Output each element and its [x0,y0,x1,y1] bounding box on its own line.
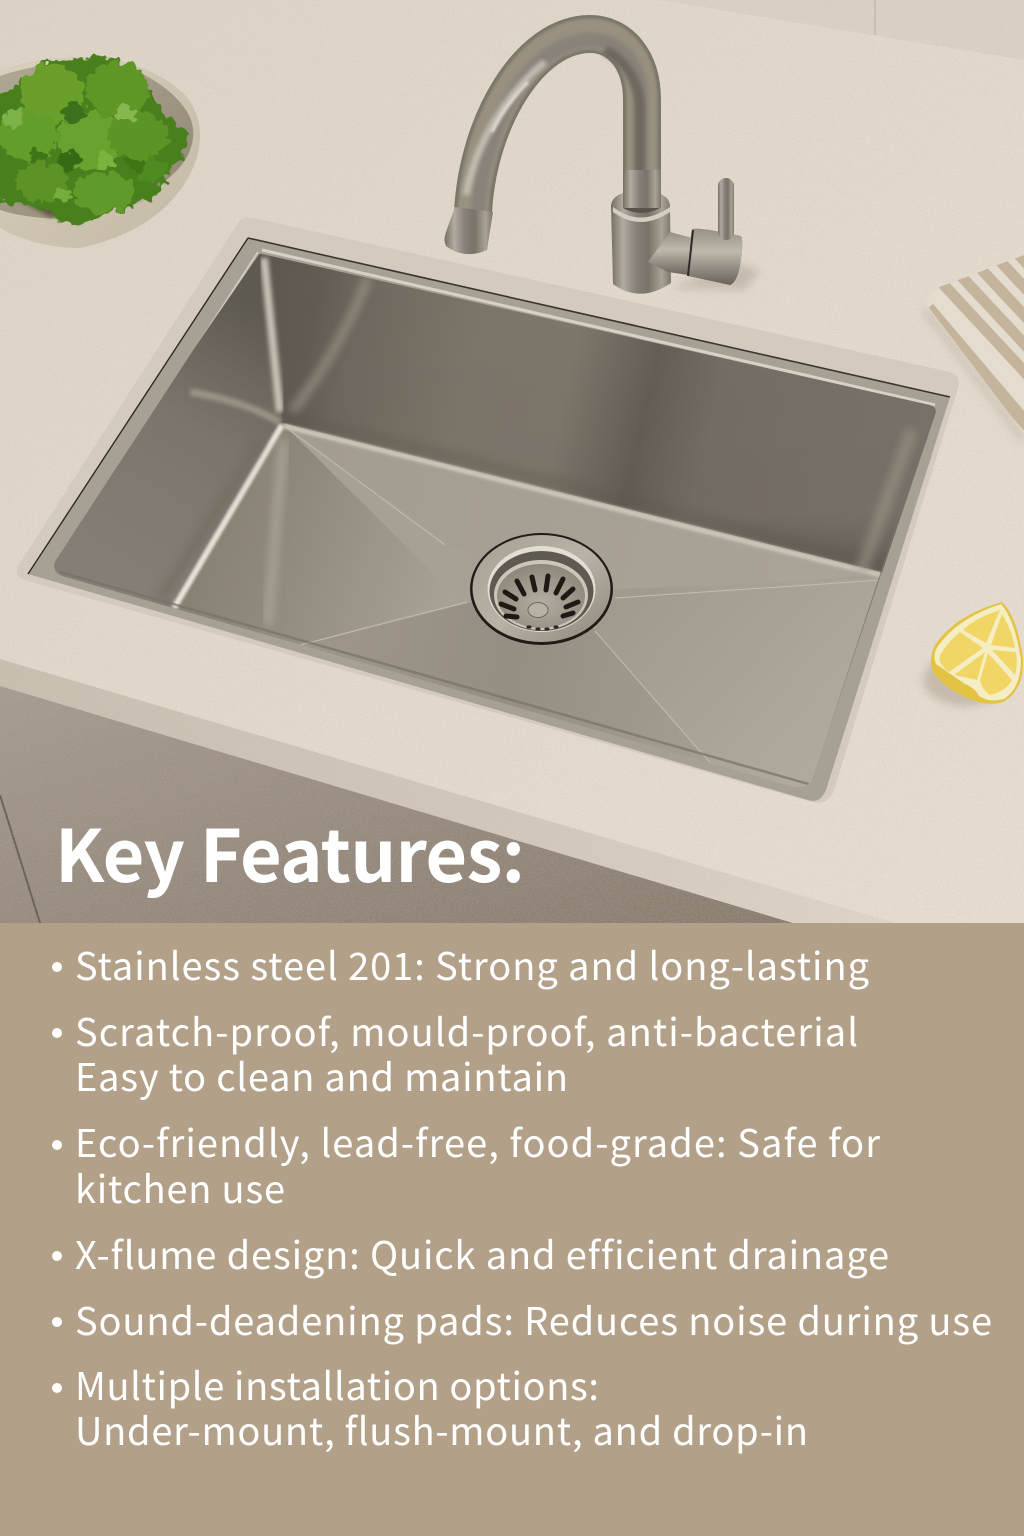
bullet 2 [52,1002,858,1102]
shaded basin edge [60,410,935,785]
bullet 2: Easy to clean and maintain [75,1047,568,1102]
feature list [52,936,992,1456]
creases and reflections [160,258,912,625]
cabinet front [0,684,793,923]
towel shadow [925,310,1024,440]
basin [40,250,940,795]
bullet 3 [52,1113,880,1214]
cabinet door seam [0,795,40,923]
nozzle [444,207,493,254]
counter front edge [0,659,895,923]
lemon pith [934,604,1021,700]
base collar ring [613,207,670,222]
fold lines [284,426,882,765]
kitchen photo illustration [0,0,1024,923]
base body [611,191,671,294]
drain cap [528,602,548,618]
counter speckle [0,0,1024,923]
faucet [444,34,760,294]
faucet shadow [670,262,760,290]
bullet 1: Stainless steel 201: Strong and long-lasting [75,936,869,991]
sink flange [17,217,959,803]
spout [466,34,650,215]
bullet 6 [52,1356,808,1456]
handle collar [688,229,742,285]
drain [470,533,613,645]
left wall [40,250,282,608]
title: Key Features: [55,798,525,903]
wall tiles [660,0,1024,60]
bowl shadow under lettuce [0,120,184,217]
bullet 6: Under-mount, flush-mount, and drop-in [75,1401,808,1456]
back wall [262,250,940,573]
lemon [923,602,1023,706]
lemon rind [931,602,1023,704]
sink [17,217,959,803]
lemon segments [940,610,1017,695]
bullet 3: Eco-friendly, lead-free, food-grade: Safe for [75,1113,880,1168]
steel rim [28,238,950,801]
bowl interior [0,62,193,219]
countertop [0,0,1024,923]
lettuce [0,56,190,226]
bowl [0,57,200,248]
panel: key features background [0,923,1024,1536]
bullet 4: X-flume design: Quick and efficient drainage [75,1225,889,1280]
bullet 2: Scratch-proof, mould-proof, anti-bacterial [75,1002,858,1057]
bullet 3: kitchen use [75,1159,285,1214]
bullet 6: Multiple installation options: [75,1356,599,1411]
handle neck [648,232,700,276]
lever [718,178,734,240]
bowl with lettuce [0,56,200,248]
bullet 5: Sound-deadening pads: Reduces noise during use [75,1291,992,1346]
floor panels [173,424,402,644]
lemon shadow [923,654,1007,706]
striped towel [920,250,1024,440]
strainer slots [501,576,578,617]
